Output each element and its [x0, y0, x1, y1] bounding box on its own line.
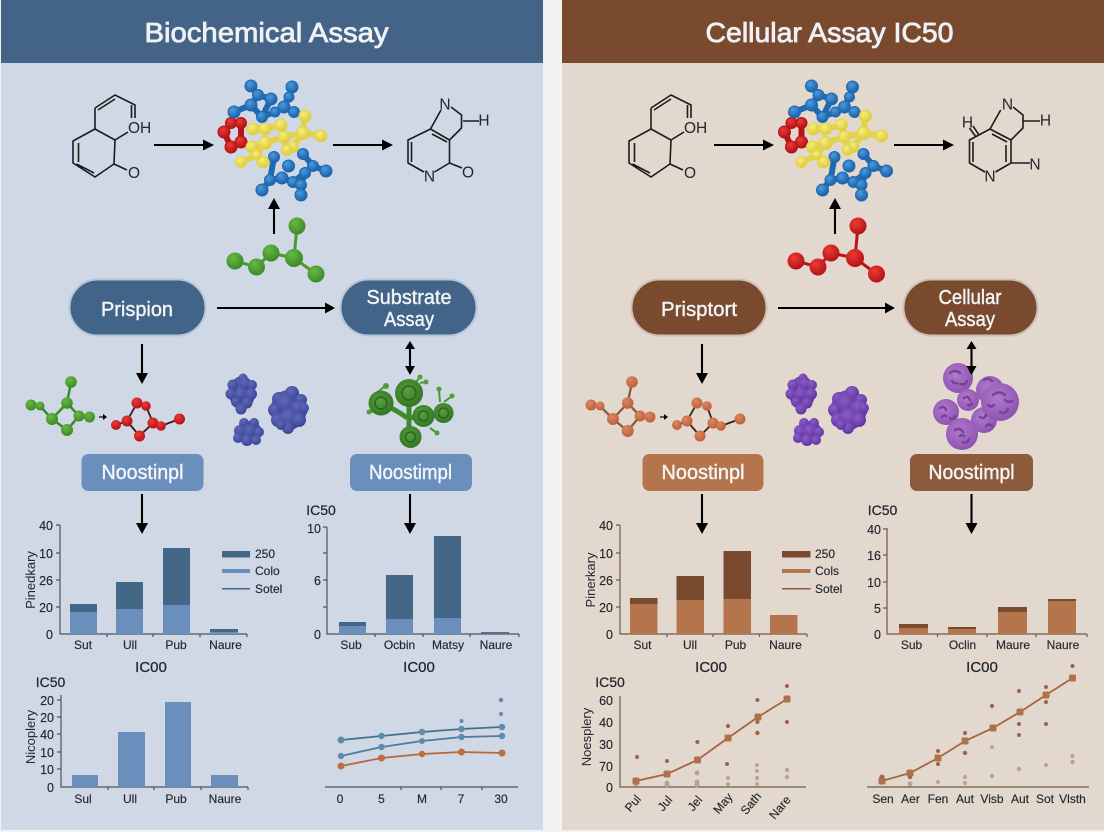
chart: scatter line left: 40: [599, 716, 613, 730]
label: noostinpl left: Noostinpl: [102, 462, 184, 484]
pill: cellular assay: Cellular: [938, 287, 1002, 309]
chart: stacked bars pinedkary: Naure: [209, 638, 242, 652]
chart: stacked bars ic50 right: [867, 502, 1087, 652]
chart: bars nicoplery: 10: [40, 746, 54, 760]
arrow: substrate to enzyme right: [714, 140, 774, 150]
arrow: prispion down: [136, 344, 148, 384]
structure: product left: N: [439, 96, 451, 114]
chart: bars nicoplery: 20: [40, 711, 54, 725]
structure: substrate right panel: O: [684, 165, 696, 182]
structure: product right panel: [962, 96, 1051, 186]
chart: stacked bars ic50: 0: [314, 628, 321, 642]
arrow: to chart r1: [696, 494, 708, 534]
chart: stacked bars pinedkary: 40: [39, 519, 53, 533]
chart: stacked bars ic50 right: Oclin: [949, 638, 976, 652]
arrow: small conversion: [99, 414, 107, 420]
pill: prispion: Prispion: [101, 299, 173, 321]
icon: red ligand: [788, 218, 885, 282]
chart: bars nicoplery: Nicoplery: [23, 709, 38, 764]
chart: bars nicoplery: Naure: [209, 792, 242, 806]
structure: product left: H: [478, 112, 490, 130]
chart: stacked bars ic50 right: 40: [867, 523, 881, 537]
chart: bars nicoplery: 40: [40, 728, 54, 742]
chart: scatter line left: 0: [606, 781, 613, 795]
icon: green organoid: [366, 374, 454, 448]
chart: scatter line left: Pul: [622, 792, 644, 815]
panel: cellular assay: [562, 0, 1104, 830]
arrow: up to enzyme: [268, 198, 280, 234]
chart: scatter line left: Jel: [685, 793, 705, 814]
legend: chart r1: [782, 547, 842, 596]
pill: cellular assay: [904, 280, 1038, 336]
chart: bars nicoplery: IC50: [36, 674, 65, 690]
icon: small green molecule: [26, 376, 95, 436]
structure: product right panel: H: [1040, 112, 1051, 130]
arrow: prisptort down: [696, 344, 708, 384]
chart: stacked bars ic50 right: IC50: [868, 502, 897, 518]
chart: line series: 30: [494, 792, 508, 806]
chart: scatter line right: Vlsth: [1059, 792, 1086, 806]
chart: line series: [325, 698, 518, 806]
title: ic00 left: IC00: [135, 659, 167, 676]
chart: scatter line left: 30: [599, 738, 613, 752]
chart: stacked bars pinerkary: 26: [599, 574, 613, 588]
chart: stacked bars ic50 right: 5: [874, 602, 881, 616]
legend: chart r1: Sotel: [815, 582, 842, 596]
icon: enzyme protein right: [778, 80, 892, 201]
chart: stacked bars pinedkary: [23, 519, 282, 652]
pill: substrate assay: [340, 280, 476, 336]
chart: scatter line left: Noesplery: [579, 707, 594, 766]
title: ic00 right: IC00: [403, 659, 435, 676]
icon: green ligand: [226, 218, 324, 282]
pill: prispion: [70, 280, 206, 336]
title: ic00 right panel left: IC00: [695, 659, 727, 676]
chart: stacked bars ic50: 10: [307, 522, 321, 536]
chart: scatter line right: Aut: [956, 792, 975, 806]
chart: scatter line left: [579, 674, 806, 822]
chart: stacked bars pinedkary: 10: [39, 547, 53, 561]
chart: stacked bars ic50 right: 0: [874, 628, 881, 642]
pill: prisptort: [632, 280, 766, 336]
icon: small orange molecule left: [586, 376, 656, 437]
pill: substrate assay: Substrate: [366, 287, 452, 309]
chart: bars nicoplery: 10: [40, 763, 54, 777]
arrow: double headed: [405, 341, 415, 375]
icon: small red molecule: [111, 398, 185, 442]
chart: stacked bars ic50: Matsy: [432, 638, 464, 652]
arrow: to chart r2: [966, 494, 978, 534]
chart: scatter line left: Sath: [738, 789, 764, 817]
chart: line series: 0: [337, 792, 344, 806]
chart: bars nicoplery: Sul: [74, 792, 92, 806]
legend: chart 1: 250: [255, 547, 275, 561]
header bar: cellular: [562, 0, 1104, 63]
chart: bars nicoplery: 0: [47, 781, 54, 795]
heading: biochemical assay: Biochemical Assay: [144, 17, 388, 48]
panel: biochemical assay: [1, 0, 543, 830]
chart: scatter line left: Jul: [655, 793, 675, 814]
icon: enzyme protein: [218, 80, 332, 201]
chart: scatter line left: IC50: [595, 674, 625, 690]
arrow: to chart 2: [404, 494, 416, 534]
chart: scatter line right: Aut: [1011, 792, 1030, 806]
chart: stacked bars pinedkary: Ull: [123, 638, 137, 652]
chart: stacked bars pinerkary: Ull: [683, 638, 697, 652]
legend: chart r1: Cols: [815, 564, 839, 578]
structure: substrate left: [73, 95, 151, 182]
arrow: enzyme to product right: [894, 140, 954, 150]
structure: substrate left: OH: [128, 120, 151, 137]
chart: bars nicoplery: 20: [40, 694, 54, 708]
arrow: small conversion right: [660, 414, 668, 420]
legend: chart 1: Sotel: [255, 582, 282, 596]
label: noostinpl right: Noostimpl: [369, 462, 452, 484]
chart: stacked bars pinedkary: Pinedkary: [23, 551, 38, 609]
arrow: to chart 1: [136, 494, 148, 534]
label: noostinpl left: [82, 454, 204, 491]
arrow: substrate to enzyme: [154, 140, 214, 150]
chart: line series: 5: [378, 792, 385, 806]
structure: product left: O: [462, 164, 474, 182]
chart: stacked bars pinerkary: 40: [599, 519, 613, 533]
header bar: biochemical: [1, 0, 543, 63]
pill: prisptort: Prisptort: [661, 299, 737, 321]
chart: stacked bars ic50: [306, 502, 519, 652]
legend: chart r1: 250: [815, 547, 835, 561]
label: noostinpl right panel left: [642, 454, 764, 491]
chart: stacked bars pinerkary: 10: [599, 547, 613, 561]
chart: bars nicoplery: [23, 674, 248, 806]
chart: stacked bars pinerkary: 0: [606, 628, 613, 642]
chart: stacked bars ic50 right: Maure: [996, 638, 1030, 652]
chart: stacked bars ic50 right: Sub: [901, 638, 922, 652]
chart: stacked bars pinedkary: Sut: [74, 638, 93, 652]
chart: stacked bars ic50 right: Naure: [1047, 638, 1080, 652]
arrow: enzyme to product: [333, 140, 393, 150]
structure: product right panel: N: [1029, 156, 1041, 174]
chart: stacked bars ic50: Ocbin: [384, 638, 415, 652]
label: noostinpl right: [350, 454, 472, 491]
pill: cellular assay: Assay: [945, 309, 995, 331]
structure: product right panel: H: [962, 114, 973, 132]
arrow: double headed right: [966, 341, 976, 375]
pill: substrate assay: Assay: [384, 309, 434, 331]
structure: substrate left: O: [128, 165, 140, 182]
arrow: prisptort to cellular assay: [778, 302, 895, 314]
structure: product right panel: N: [1002, 96, 1013, 114]
chart: line series: M: [417, 792, 427, 806]
structure: product left: [408, 96, 490, 186]
chart: stacked bars ic50: 6: [314, 574, 321, 588]
chart: scatter line right: Visb: [980, 792, 1004, 806]
structure: substrate right panel: OH: [684, 120, 707, 137]
chart: stacked bars pinedkary: 26: [39, 574, 53, 588]
chart: stacked bars pinerkary: Naure: [769, 638, 802, 652]
chart: scatter line left: 70: [599, 760, 613, 774]
chart: scatter line left: 60: [599, 694, 613, 708]
structure: substrate right panel: [629, 95, 707, 182]
chart: scatter line right: Sot: [1036, 792, 1055, 806]
chart: stacked bars pinerkary: Pub: [725, 638, 746, 652]
structure: product left: N: [424, 168, 435, 186]
chart: bars nicoplery: Ull: [123, 792, 137, 806]
chart: stacked bars ic50 right: 10: [867, 576, 881, 590]
chart: stacked bars pinerkary: Pinerkary: [583, 552, 598, 607]
label: noostinpl right panel left: Noostinpl: [662, 462, 744, 484]
structure: product right panel: N: [984, 168, 996, 186]
chart: scatter line left: Nare: [766, 793, 794, 822]
chart: scatter line right: Fen: [928, 792, 948, 806]
chart: stacked bars pinedkary: Pub: [165, 638, 187, 652]
chart: scatter line right: Sen: [872, 792, 894, 806]
legend: chart 1: Colo: [255, 564, 280, 578]
heading: cellular assay ic50: Cellular Assay IC50: [706, 17, 954, 48]
chart: stacked bars pinerkary: 20: [599, 601, 613, 615]
chart: scatter line left: May: [710, 790, 736, 817]
title: ic00 right panel right: IC00: [966, 659, 998, 676]
chart: stacked bars pinerkary: Sut: [633, 638, 652, 652]
arrow: prispion to substrate assay: [217, 302, 335, 314]
chart: stacked bars pinedkary: 20: [39, 601, 53, 615]
chart: stacked bars ic50 right: 16: [867, 549, 881, 563]
chart: scatter line right: [867, 664, 1089, 806]
icon: purple cells: [933, 363, 1019, 450]
chart: stacked bars pinedkary: 0: [46, 628, 53, 642]
chart: scatter line right: Aer: [901, 792, 920, 806]
label: noostimpl right panel right: [910, 454, 1033, 491]
icon: small orange molecule right: [672, 398, 746, 442]
chart: stacked bars ic50: Naure: [480, 638, 513, 652]
arrow: up to enzyme right: [829, 198, 841, 234]
chart: bars nicoplery: Pub: [165, 792, 187, 806]
chart: stacked bars pinerkary: [583, 519, 842, 652]
label: noostimpl right panel right: Noostimpl: [928, 462, 1014, 484]
chart: line series: 7: [458, 792, 465, 806]
chart: stacked bars ic50: Sub: [340, 638, 362, 652]
chart: stacked bars ic50: IC50: [306, 502, 336, 518]
icon: indigo protein clusters: [226, 374, 309, 446]
icon: purple protein clusters: [786, 374, 869, 446]
legend: chart 1: [222, 547, 282, 596]
